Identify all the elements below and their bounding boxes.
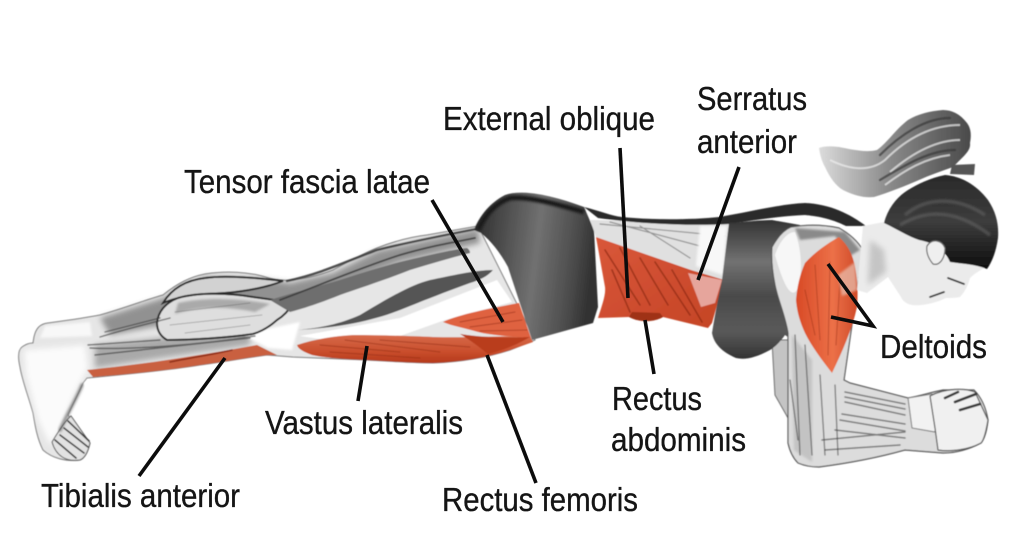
label: Rectus abdominis: Rectus [612, 380, 702, 417]
shorts [474, 193, 598, 340]
fist [930, 389, 988, 451]
ponytail [819, 110, 975, 197]
label: Rectus abdominis [611, 320, 746, 458]
label: Serratus anterior: Serratus [697, 80, 807, 117]
label: Vastus lateralis: Vastus lateralis [265, 404, 463, 441]
sports top [712, 220, 800, 359]
thigh muscle slivers [297, 270, 493, 330]
white highlights [300, 280, 512, 339]
shorts rim [478, 198, 584, 230]
label: Tibialis anterior: Tibialis anterior [41, 477, 240, 514]
toes [52, 385, 90, 460]
label: Deltoids: Deltoids [880, 328, 987, 365]
rear calf [163, 277, 283, 303]
muscle: tensor fascia latae and rectus femoris [443, 303, 531, 354]
figure: woman in plank pose [19, 110, 998, 467]
rear arm [772, 340, 800, 418]
label: Serratus anterior [697, 80, 807, 280]
front calf [157, 294, 293, 340]
label: Tensor fascia latae: Tensor fascia latae [184, 163, 430, 200]
muscle: vastus lateralis [297, 335, 533, 363]
label: Tibialis anterior [41, 358, 240, 514]
label: External oblique: External oblique [443, 100, 655, 137]
muscle: deltoids [796, 237, 858, 373]
hair strands [900, 201, 990, 235]
ear [927, 241, 945, 264]
muscle: serratus anterior [688, 273, 722, 307]
label: Deltoids [828, 264, 987, 365]
eye and mouth [930, 278, 964, 297]
label: Rectus femoris: Rectus femoris [442, 481, 638, 518]
hair [884, 175, 998, 269]
legs and hips base [19, 226, 535, 461]
back dark strip [584, 203, 866, 226]
label: External oblique [443, 100, 655, 298]
muscle: tibialis anterior [87, 345, 277, 377]
hair tie [950, 164, 975, 175]
front arm [772, 225, 988, 467]
muscle: external oblique and rectus abdominis [596, 237, 724, 328]
label: Rectus abdominis: abdominis [611, 421, 746, 458]
leg shading [100, 229, 480, 335]
neck and face [857, 222, 987, 305]
label: Serratus anterior: anterior [697, 123, 797, 160]
torso side: skin area [590, 220, 729, 282]
forearm striations [822, 392, 905, 450]
label: Rectus femoris [442, 355, 638, 518]
label: Vastus lateralis [265, 346, 463, 441]
neck shading [868, 240, 886, 285]
label: Tensor fascia latae [184, 163, 503, 322]
